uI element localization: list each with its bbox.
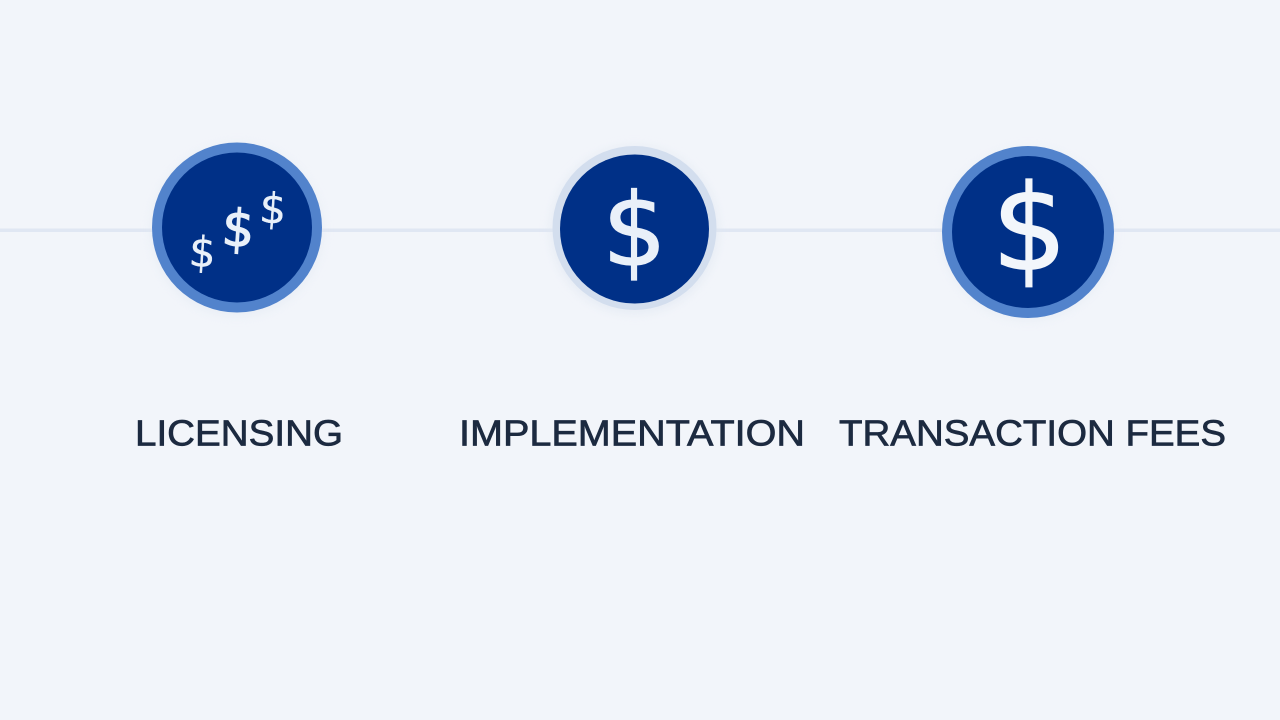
- icon: implementation, single dollar sign in a circle: $: [602, 171, 667, 289]
- icon: transaction fees, large dollar sign in a circle: [942, 146, 1114, 320]
- label: licensing: LICENSING: [135, 412, 343, 454]
- icon: transaction fees, large dollar sign in a circle: $: [992, 160, 1067, 298]
- label: implementation: IMPLEMENTATION: [459, 412, 805, 454]
- icon: licensing, three dollar signs in a circle: $: [187, 227, 218, 277]
- label: transaction fees: TRANSACTION FEES: [839, 412, 1226, 454]
- icon: implementation, single dollar sign in a circle: [550, 146, 718, 314]
- icon: licensing, three dollar signs in a circle: $: [220, 199, 256, 260]
- icon: licensing, three dollar signs in a circle: [151, 142, 323, 316]
- icon: licensing, three dollar signs in a circle: $: [258, 183, 288, 234]
